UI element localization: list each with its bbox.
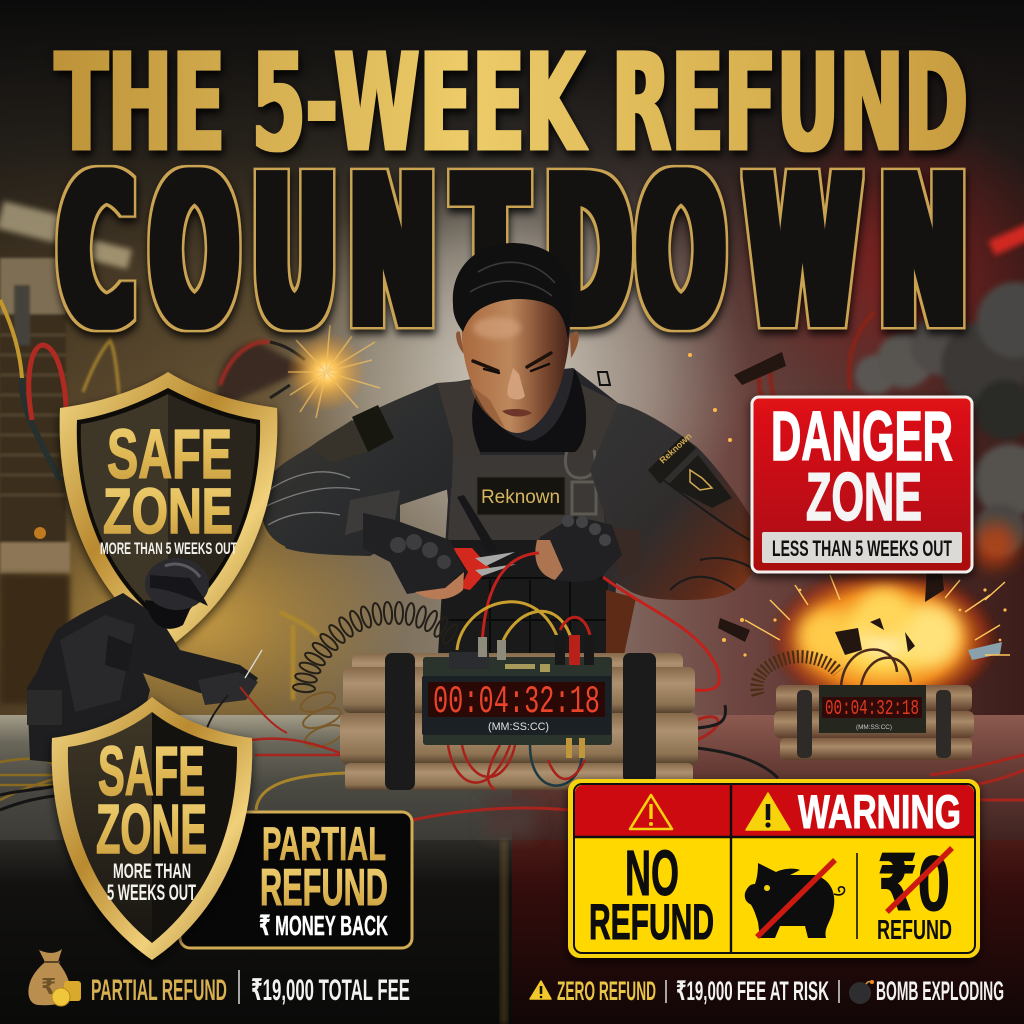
icon: money bag with coins: ₹ (41, 974, 56, 999)
small bomb on the right: (MM:SS:CC) (856, 724, 892, 731)
money back line: ₹ MONEY BACK (259, 910, 388, 941)
icon: bomb (849, 980, 874, 1004)
footer right: zero refund fee at risk bomb exploding: ZERO REFUND (557, 976, 656, 1006)
footer left: partial refund total fee: PARTIAL REFUND (91, 974, 227, 1007)
icon: warning triangle (530, 981, 551, 999)
pliers (453, 495, 516, 590)
danger zone sign (752, 397, 972, 572)
bomb technician (259, 243, 760, 690)
crossed-out zero rupee: ₹0 (877, 839, 950, 927)
bomb technician: Reknown (658, 431, 694, 465)
coil spring wire (293, 602, 460, 751)
dynamite sticks (352, 653, 683, 683)
viewer right hand and glove (538, 516, 622, 582)
viewer left shoulder patch (352, 405, 394, 452)
main dynamite bomb (340, 602, 698, 790)
WARNING heading: WARNING (798, 785, 961, 838)
title line: COUNTDOWN: COUNTDOWN (58, 132, 967, 373)
loose red wire (482, 553, 719, 690)
ZONE heading: ZONE (806, 459, 922, 535)
cuff on viewer right arm (612, 528, 642, 578)
subtext: MORE THAN (113, 860, 191, 883)
safe zone shield lower: ZONE (96, 790, 207, 868)
partial refund panel (180, 812, 412, 948)
viewer left glove (363, 513, 464, 594)
crouching soldier (27, 558, 287, 770)
face and head (453, 243, 579, 433)
icon: outlined warning triangle (630, 795, 672, 829)
name badge: Reknown (477, 477, 565, 515)
safe zone shield lower: 5 WEEKS OUT (107, 880, 196, 905)
torso and vest (437, 368, 625, 660)
safe zone shield lower (52, 697, 252, 960)
red header bar (575, 785, 974, 837)
viewer left arm (259, 383, 453, 556)
footer right: zero refund fee at risk bomb exploding: ₹19,000 FEE AT RISK (676, 976, 829, 1006)
name badge: Reknown: Reknown (481, 486, 560, 508)
NO REFUND text: NO (625, 837, 679, 909)
orange jacket hem on the right (606, 590, 636, 655)
countdown display: (MM:SS:CC) (488, 721, 549, 733)
heading: SAFE ZONE: SAFE (107, 415, 232, 493)
safe zone shield upper (60, 372, 277, 648)
viewer right arm (590, 403, 760, 600)
footer left: partial refund total fee (28, 949, 410, 1007)
warning sign: no refund: REFUND (589, 894, 714, 950)
table wires (0, 705, 1024, 820)
sparks upper left (286, 325, 380, 418)
warning sign: no refund (568, 779, 980, 958)
strip: less than 5 weeks out (762, 532, 962, 563)
safe zone shield upper: ZONE (103, 475, 233, 547)
countdown display (422, 676, 611, 735)
small bomb on the right (757, 650, 974, 760)
high collar (472, 368, 586, 452)
subtext: MORE THAN 5 WEEKS OUT (100, 539, 237, 558)
smoke cloud on the right (855, 282, 1024, 556)
icon: yellow warning triangle (746, 793, 790, 830)
heading: SAFE ZONE: SAFE (98, 732, 205, 810)
jumper wires (457, 602, 573, 650)
black straps (385, 653, 415, 790)
crossed-out zero rupee (877, 839, 952, 945)
PARTIAL REFUND heading: PARTIAL (262, 817, 386, 870)
partial refund panel: REFUND (260, 859, 388, 917)
countdown display: 00:04:32:18 (433, 680, 600, 724)
viewer right shoulder patch (648, 436, 732, 508)
icon: money bag with coins (28, 949, 81, 1006)
footer left: partial refund total fee: ₹19,000 TOTAL FEE (251, 974, 410, 1007)
circuit board (423, 657, 612, 745)
footer right: zero refund fee at risk bomb exploding (530, 976, 1004, 1006)
icon: crossed-out piggy bank (745, 860, 845, 938)
crossed-out zero rupee: REFUND (877, 914, 952, 945)
explosion fireball (688, 352, 1017, 714)
small bomb on the right: 00:04:32:18 (825, 698, 919, 721)
shoulder straps (437, 380, 618, 456)
